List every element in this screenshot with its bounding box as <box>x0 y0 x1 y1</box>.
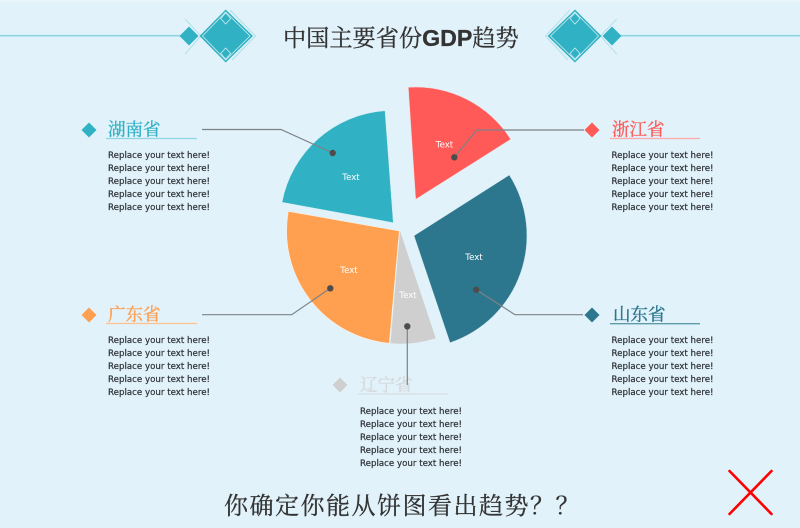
slice: 湖南省 <box>282 111 393 223</box>
callout: 浙江省: Replace your text here! <box>612 151 714 161</box>
callout: 山东省: Replace your text here! <box>612 349 714 359</box>
slice: 浙江省 <box>408 87 511 199</box>
callout: 浙江省 <box>451 116 714 213</box>
callout: 浙江省: Replace your text here! <box>612 190 714 200</box>
callout: 湖南省: Replace your text here! <box>108 190 210 200</box>
callout: 山东省: Replace your text here! <box>612 336 714 346</box>
callout: 辽宁省 <box>332 323 462 469</box>
callout: 广东省: Replace your text here! <box>108 349 210 359</box>
slice labels: Text <box>341 173 360 183</box>
callout: 山东省: Replace your text here! <box>612 362 714 372</box>
callout: 湖南省: Replace your text here! <box>108 177 210 187</box>
callout: 湖南省: Replace your text here! <box>108 151 210 161</box>
pie chart <box>282 87 527 344</box>
slice: 山东省 <box>414 175 527 343</box>
header ornament: left <box>0 10 256 62</box>
callout: 浙江省: Replace your text here! <box>612 164 714 174</box>
callout: 辽宁省: Replace your text here! <box>360 433 462 443</box>
callout: 山东省: 山东省 <box>613 302 666 326</box>
callout: 广东省: Replace your text here! <box>108 362 210 372</box>
callout: 广东省: Replace your text here! <box>108 336 210 346</box>
slice labels: Text <box>464 253 483 263</box>
callout: 辽宁省: 辽宁省 <box>360 372 413 397</box>
slice labels <box>339 140 483 301</box>
title: 中国主要省份GDP趋势 <box>283 19 519 53</box>
bottom question text: 你确定你能从饼图看出趋势？？ <box>224 486 581 521</box>
callout: 广东省 <box>82 285 333 398</box>
callout: 浙江省: 浙江省 <box>612 116 665 142</box>
callout: 辽宁省: Replace your text here! <box>360 459 462 469</box>
icon: red cross <box>730 471 772 514</box>
callout: 山东省: Replace your text here! <box>612 388 714 398</box>
callout: 湖南省: 湖南省 <box>108 116 161 142</box>
slice labels: Text <box>398 291 417 301</box>
callout: 湖南省 <box>82 116 336 213</box>
callout: 山东省 <box>473 286 714 398</box>
callout: 浙江省: Replace your text here! <box>612 203 714 213</box>
slice: 广东省 <box>287 211 399 343</box>
callout: 辽宁省: Replace your text here! <box>360 420 462 430</box>
header ornament: right <box>546 10 800 62</box>
callout: 辽宁省: Replace your text here! <box>360 446 462 456</box>
callout: 湖南省: Replace your text here! <box>108 203 210 213</box>
slice labels: Text <box>339 266 358 276</box>
callout: 辽宁省: Replace your text here! <box>360 407 462 417</box>
callout: 湖南省: Replace your text here! <box>108 164 210 174</box>
callout: 广东省: Replace your text here! <box>108 388 210 398</box>
slice labels: Text <box>435 140 454 150</box>
callout: 浙江省: Replace your text here! <box>612 177 714 187</box>
callout: 广东省: Replace your text here! <box>108 375 210 385</box>
callout: 广东省: 广东省 <box>108 302 161 326</box>
slice: 辽宁省 <box>390 231 436 344</box>
callout: 山东省: Replace your text here! <box>612 375 714 385</box>
